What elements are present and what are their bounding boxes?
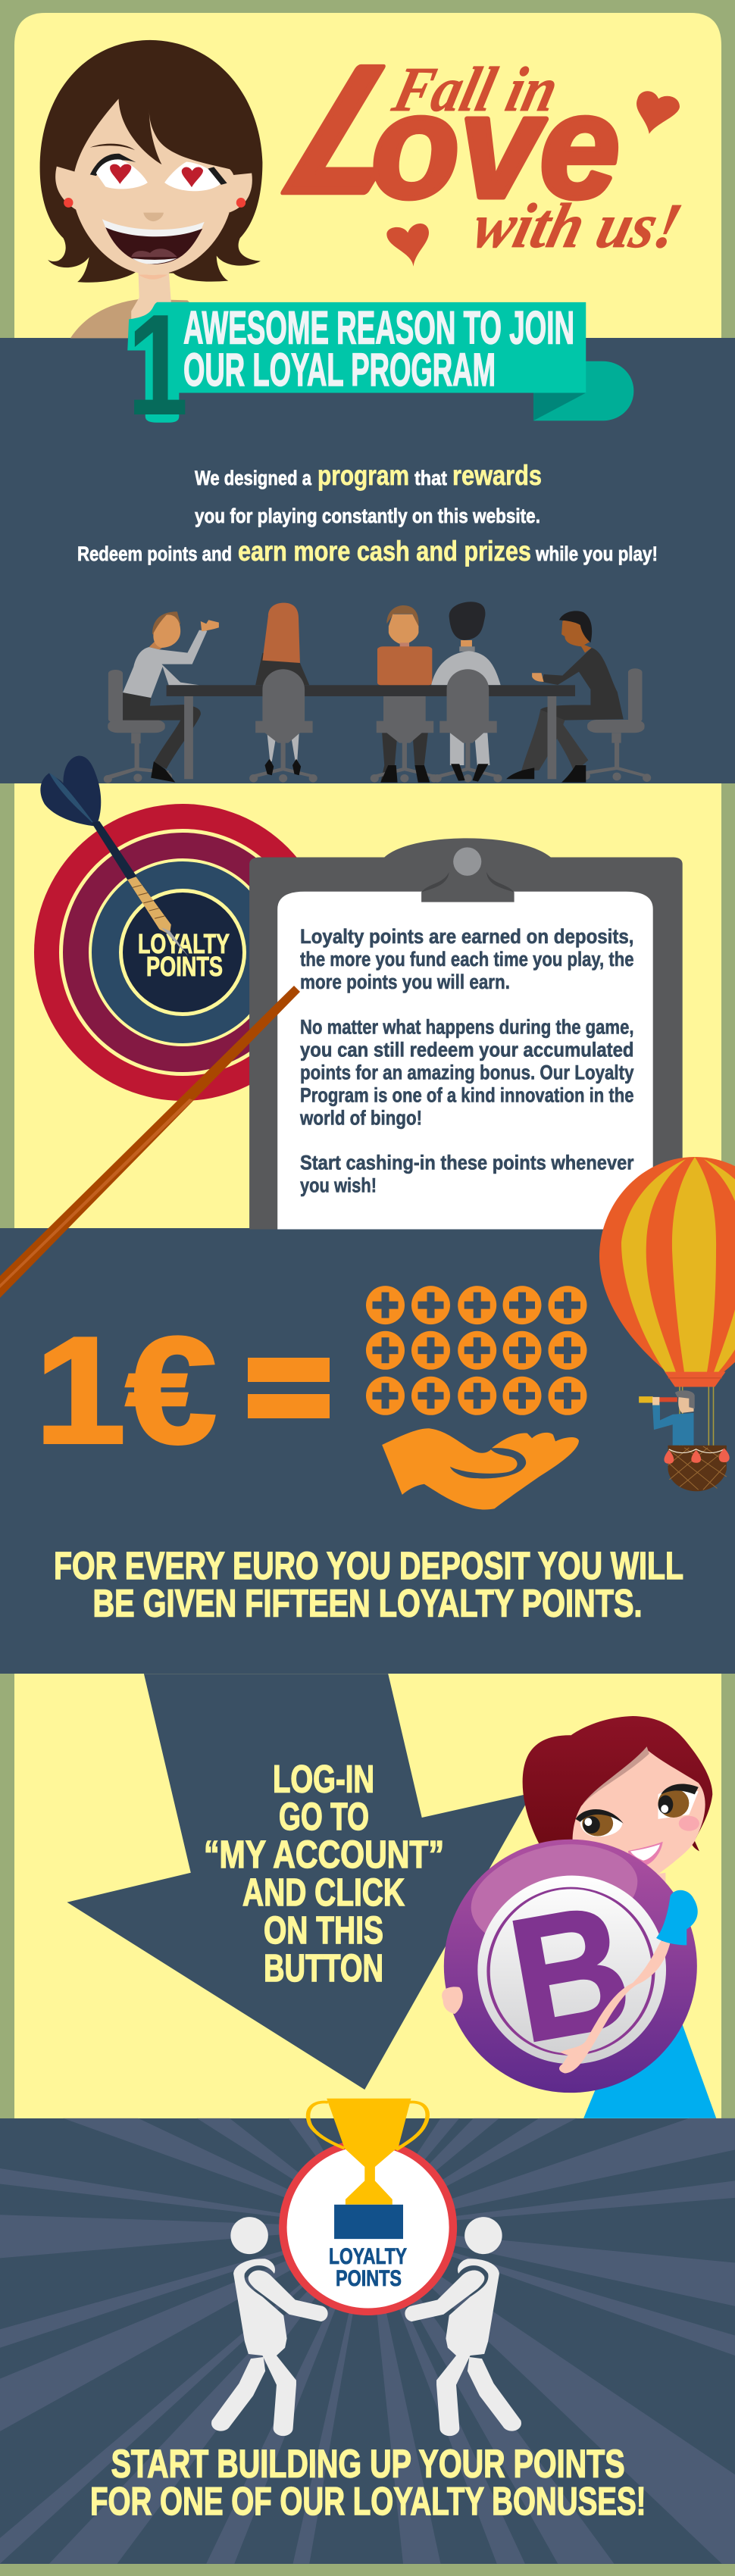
- target label: LOYALTY: [138, 928, 230, 959]
- clipboard text: you wish!: [300, 1174, 377, 1197]
- person 1: [123, 692, 201, 769]
- illustration: meeting table: [104, 602, 651, 783]
- icon: heart upper right: [636, 91, 680, 134]
- right chair: [582, 668, 651, 782]
- numeral 1: 1: [127, 284, 188, 445]
- left chair: [104, 670, 172, 783]
- clipboard text: the more you fund each time you play, the: [300, 948, 633, 971]
- icon: open hand: [382, 1428, 579, 1509]
- clipboard text: Start cashing-in these points whenever: [300, 1152, 634, 1174]
- clipboard text: Loyalty points are earned on deposits,: [300, 925, 633, 948]
- person 4: [449, 602, 485, 640]
- target board: [34, 804, 331, 1101]
- panel: log-in yellow: [14, 1674, 721, 2119]
- clipboard text: [299, 925, 634, 1197]
- clipboard text: No matter what happens during the game,: [300, 1015, 633, 1038]
- clipboard text: Program is one of a kind innovation in the: [300, 1083, 633, 1106]
- intro text: earn more cash and prizes: [238, 536, 531, 567]
- intro text: that: [414, 467, 447, 489]
- bingo ball letter: B: [496, 1866, 643, 2080]
- closing caption: [90, 2442, 646, 2524]
- heading: Fall in Love with us: Fall in: [386, 55, 565, 125]
- intro text: you for playing constantly on this website.: [195, 505, 540, 527]
- figure: right carrier: [405, 2217, 521, 2436]
- log-in instructions: BUTTON: [264, 1946, 383, 1990]
- panel: euro dark band: [0, 1228, 735, 1674]
- clipboard text: you can still redeem your accumulated: [300, 1039, 633, 1061]
- medal label: [329, 2244, 407, 2291]
- panel: closing dark band: [0, 2118, 735, 2564]
- log-in instructions: “MY ACCOUNT”: [204, 1833, 444, 1876]
- log-in instructions: [204, 1757, 444, 1990]
- person 5: [540, 648, 624, 721]
- sunburst rays: [0, 2118, 735, 2564]
- equation: equals sign: [248, 1358, 330, 1418]
- icon: hot-air balloon: [599, 1157, 735, 1491]
- arrow pointing to button: [67, 1674, 532, 2090]
- heading: Fall in Love with us: L: [252, 30, 468, 229]
- intro text: [77, 460, 658, 567]
- ribbon text: [183, 302, 574, 395]
- illustration: girl holding bingo ball: [442, 1716, 716, 2118]
- ribbon text: OUR LOYAL PROGRAM: [183, 344, 496, 395]
- heading: Fall in Love with us: with us!: [466, 191, 688, 261]
- foreground shoes: [265, 759, 489, 783]
- clipboard text: points for an amazing bonus. Our Loyalty: [300, 1061, 633, 1083]
- clipboard text: more points you will earn.: [300, 971, 510, 993]
- medal label: POINTS: [336, 2266, 402, 2291]
- chair 2 stem, person 2: [255, 653, 309, 685]
- log-in instructions: LOG-IN: [273, 1757, 374, 1800]
- icon: heart lower: [386, 224, 429, 267]
- log-in instructions: ON THIS: [264, 1909, 383, 1952]
- heading: Fall in Love with us: [252, 30, 688, 261]
- figure: left carrier: [211, 2217, 328, 2436]
- clipboard: [249, 838, 683, 1230]
- loyalty medal with trophy: [279, 2099, 457, 2315]
- illustration: woman with heart eyes: [40, 40, 262, 338]
- panel: header yellow: [14, 13, 721, 349]
- log-in instructions: GO TO: [279, 1795, 369, 1838]
- icon: dart: [40, 756, 189, 956]
- person 3: [386, 605, 419, 627]
- euro caption: [54, 1544, 683, 1625]
- medal label: LOYALTY: [329, 2244, 407, 2269]
- intro text: rewards: [452, 460, 542, 491]
- target label: [138, 928, 230, 982]
- target label: POINTS: [146, 951, 223, 982]
- icon: stick: [0, 986, 300, 1298]
- icon: fifteen plus coins: [366, 1286, 586, 1415]
- intro text: while you play!: [535, 542, 658, 565]
- ribbon banner: [127, 284, 633, 445]
- clipboard text: world of bingo!: [299, 1106, 422, 1129]
- log-in instructions: AND CLICK: [242, 1871, 405, 1914]
- equation: 1 euro: 1€: [35, 1306, 217, 1475]
- intro text: Redeem points and: [77, 542, 232, 565]
- heading: Fall in Love with us: ove: [371, 64, 620, 229]
- intro text: We designed a: [195, 467, 312, 489]
- intro text: program: [317, 460, 409, 491]
- panel: intro dark band: [0, 338, 735, 783]
- panel: loyalty points yellow: [14, 783, 721, 1229]
- center chairs: [249, 669, 502, 783]
- table: [167, 685, 575, 696]
- bingo ball: [444, 1840, 697, 2093]
